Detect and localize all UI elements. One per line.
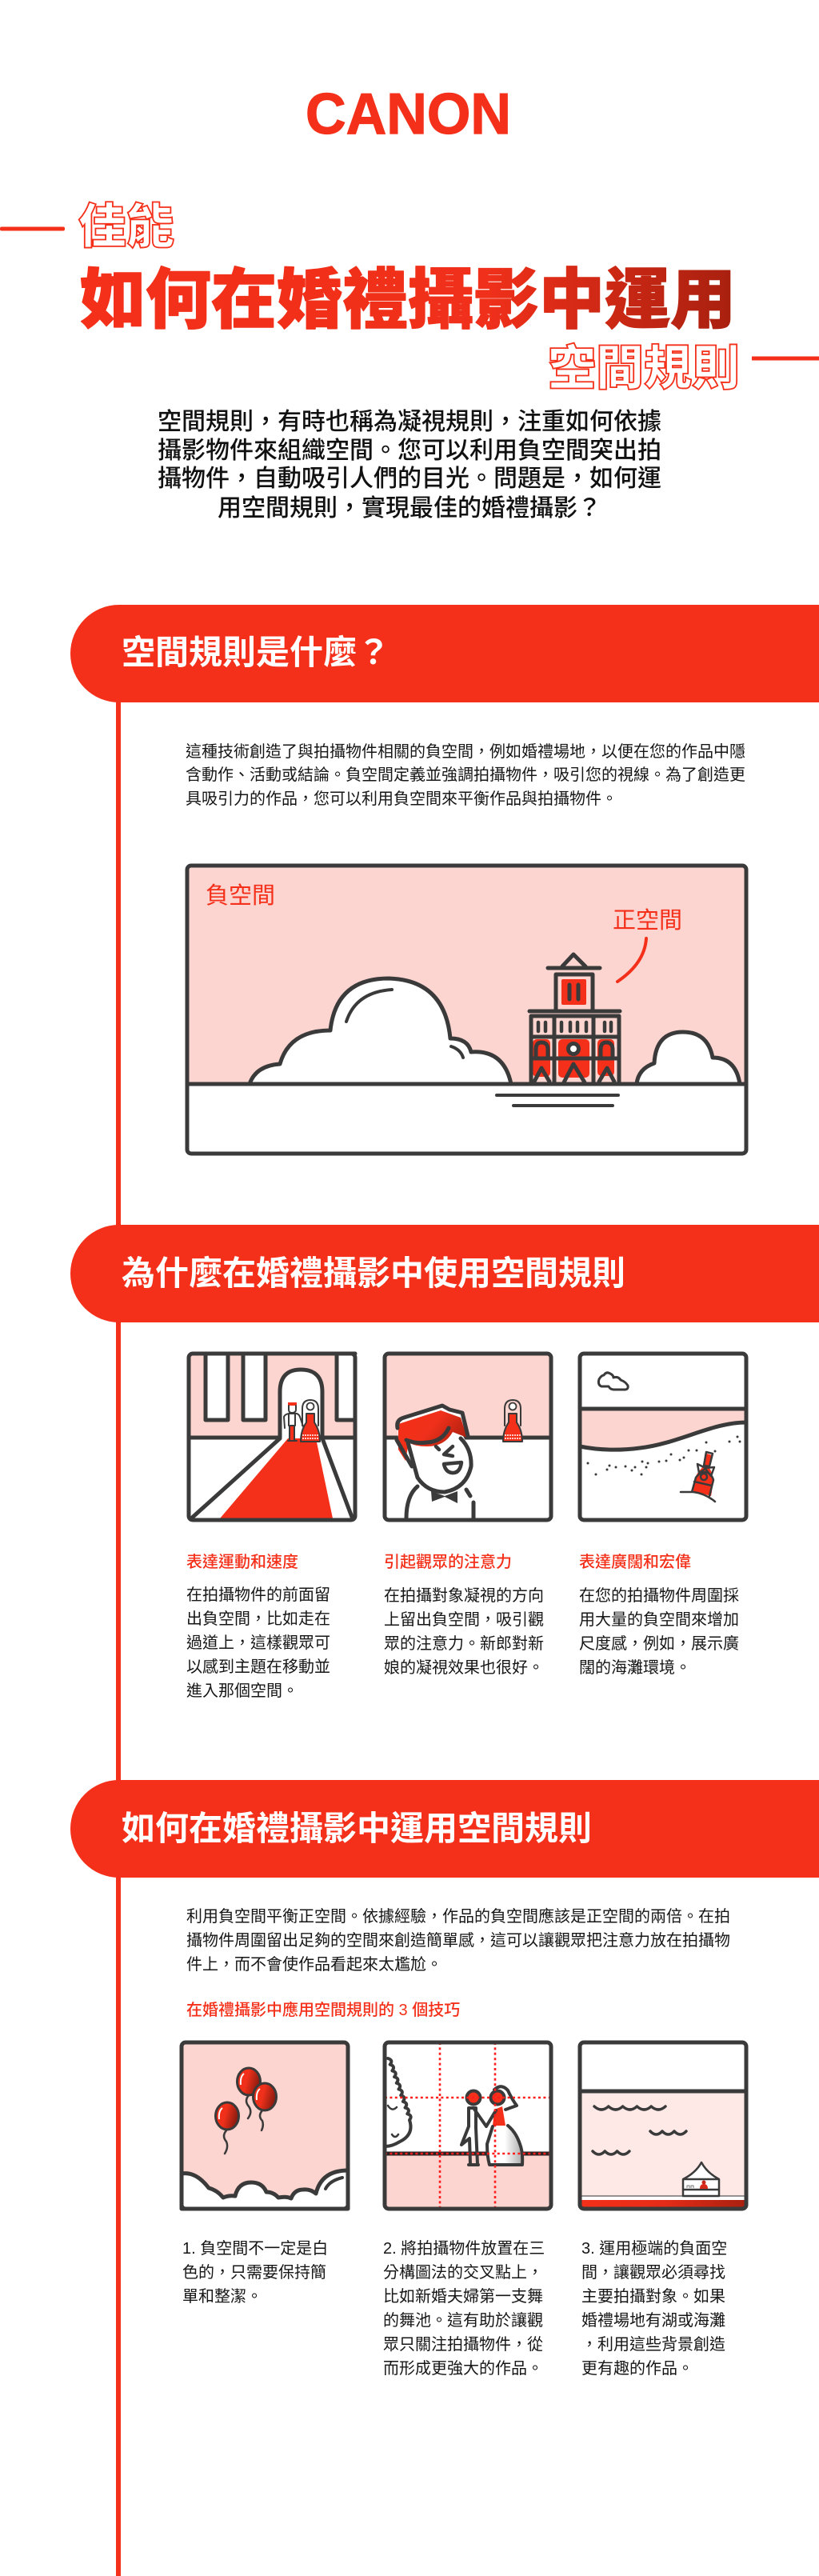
footprints dots: [587, 1435, 741, 1475]
tip 2 text: 分構圖法的交叉點上，: [383, 2259, 543, 2282]
section header 2: 為什麼在婚禮攝影中使用空間規則: [122, 1246, 625, 1295]
tip 3 text: 婚禮場地有湖或海灘: [581, 2307, 725, 2330]
illustration: aisle with couple: [189, 1354, 355, 1520]
tip 2 text: 眾只關注拍攝物件，從: [383, 2331, 543, 2354]
column 2 text: 娘的凝視效果也很好。: [384, 1654, 544, 1678]
balloons: [216, 2068, 277, 2130]
illustration: balloons: [182, 2042, 348, 2209]
pointer arrow: [617, 938, 646, 982]
tip 2 text: 2. 將拍攝物件放置在三: [383, 2239, 545, 2258]
intro text: 攝影物件來組織空間。您可以利用負空間突出拍: [158, 430, 661, 466]
column 2 text: 上留出負空間，吸引觀: [384, 1606, 544, 1630]
column 2 text: 引起觀眾的注意力: [384, 1553, 512, 1571]
column 2 text: 在拍攝對象凝視的方向: [384, 1582, 544, 1606]
illustration: negative and positive space: [187, 866, 746, 1154]
section 3 body text: 件上，而不會使作品看起來太尷尬。: [186, 1951, 442, 1974]
section header 1: [70, 605, 819, 702]
bride: [301, 1400, 320, 1442]
right accent line: [752, 357, 819, 360]
tip 3 text: [581, 2239, 727, 2378]
big cloud: [250, 978, 511, 1084]
tip 1 text: 1. 負空間不一定是白: [182, 2239, 328, 2258]
church: [529, 954, 620, 1082]
tree: [385, 2056, 411, 2154]
section 1 body text: 含動作、活動或結論。負空間定義並強調拍攝物件，吸引您的視線。為了創造更: [186, 762, 745, 785]
section header 1: 空間規則是什麼？: [122, 626, 390, 674]
illustration: groom gazing at bride: [385, 1354, 551, 1520]
column 3 text: 在您的拍攝物件周圍採: [579, 1582, 739, 1606]
tips heading: 在婚禮攝影中應用空間規則的 3 個技巧: [186, 2000, 460, 2019]
waves: [593, 2106, 686, 2154]
tip 1 text: 色的，只需要保持簡: [182, 2259, 326, 2282]
column 1 text: 進入那個空間。: [186, 1678, 298, 1701]
column 1 text: 以感到主題在移動並: [186, 1654, 330, 1677]
brand name outlined: 佳能: [78, 200, 174, 254]
tip 3 text: 主要拍攝對象。如果: [581, 2283, 725, 2306]
tiny couple on beach: [681, 1452, 715, 1502]
column 3 text: 表達廣闊和宏偉: [579, 1553, 691, 1571]
spine line: [116, 688, 121, 2576]
section header 3: 如何在婚禮攝影中運用空間規則: [122, 1802, 592, 1850]
tip 1 text: [182, 2239, 328, 2306]
tip 1 text: 單和整潔。: [182, 2283, 262, 2306]
tip 2 text: 比如新婚夫婦第一支舞: [383, 2283, 543, 2306]
bride distant: [503, 1400, 522, 1442]
small cloud: [598, 1373, 628, 1390]
main title: 如何在婚禮攝影中運用: [80, 264, 736, 337]
intro text: [158, 402, 661, 523]
groom: [284, 1402, 303, 1441]
balloon strings: [224, 2095, 263, 2154]
column 1 text: 在拍攝物件的前面留: [186, 1582, 330, 1605]
column 1 text: [186, 1553, 330, 1701]
column 2 text: 眾的注意力。新郎對新: [384, 1630, 544, 1654]
section header 2: [70, 1225, 819, 1322]
tent: [683, 2162, 719, 2196]
column 3 text: 尺度感，例如，展示廣: [579, 1630, 739, 1654]
tip 3 text: ，利用這些背景創造: [581, 2331, 725, 2354]
tip 2 text: [383, 2239, 545, 2378]
logo: CANON: CANON: [306, 82, 511, 146]
illustration: vast beach: [580, 1354, 746, 1520]
section 3 body text: [186, 1903, 730, 1974]
illustration: lake and tent: [580, 2042, 746, 2209]
column 1 text: 過道上，這樣觀眾可: [186, 1630, 330, 1653]
column 1 text: 出負空間，比如走在: [186, 1606, 330, 1629]
column 1 text: 表達運動和速度: [186, 1553, 298, 1571]
section 3 body text: 攝物件周圍留出足夠的空間來創造簡單感，這可以讓觀眾把注意力放在拍攝物: [186, 1927, 730, 1950]
section header 3: [70, 1780, 819, 1878]
column 3 text: 用大量的負空間來增加: [579, 1606, 739, 1630]
intro text: 攝物件，自動吸引人們的目光。問題是，如何運: [158, 458, 661, 494]
horizon: [187, 1082, 746, 1086]
tip 3 text: 3. 運用極端的負面空: [581, 2239, 727, 2258]
subtitle outlined: 空間規則: [548, 342, 740, 395]
tip 2 text: 而形成更強大的作品。: [383, 2355, 543, 2378]
illustration: rule of thirds couple: [385, 2042, 551, 2209]
tip 2 text: 的舞池。這有助於讓觀: [383, 2307, 543, 2330]
cloud bottom: [182, 2170, 348, 2209]
groom portrait: [397, 1406, 473, 1518]
column 2 text: [384, 1553, 544, 1678]
tip 3 text: 間，讓觀眾必須尋找: [581, 2259, 725, 2282]
left accent line: [0, 227, 65, 230]
section 1 body text: 這種技術創造了與拍攝物件相關的負空間，例如婚禮場地，以便在您的作品中隱: [186, 738, 745, 762]
small cloud: [637, 1032, 740, 1084]
column 3 text: 闊的海灘環境。: [579, 1654, 691, 1678]
section 3 body text: 利用負空間平衡正空間。依據經驗，作品的負空間應該是正空間的兩倍。在拍: [186, 1903, 730, 1926]
section 1 body text: 具吸引力的作品，您可以利用負空間來平衡作品與拍攝物件。: [186, 786, 617, 809]
label: positive space: 正空間: [613, 907, 682, 934]
intro text: 空間規則，有時也稱為凝視規則，注重如何依據: [158, 402, 661, 437]
intro text: 用空間規則，實現最佳的婚禮攝影？: [218, 488, 601, 523]
section 1 body text: [186, 738, 745, 809]
couple: [461, 2086, 522, 2165]
tip 3 text: 更有趣的作品。: [581, 2355, 693, 2378]
label: negative space: 負空間: [206, 882, 275, 909]
column 3 text: [579, 1553, 739, 1678]
title block: [0, 200, 819, 395]
thirds grid: [385, 2042, 551, 2209]
